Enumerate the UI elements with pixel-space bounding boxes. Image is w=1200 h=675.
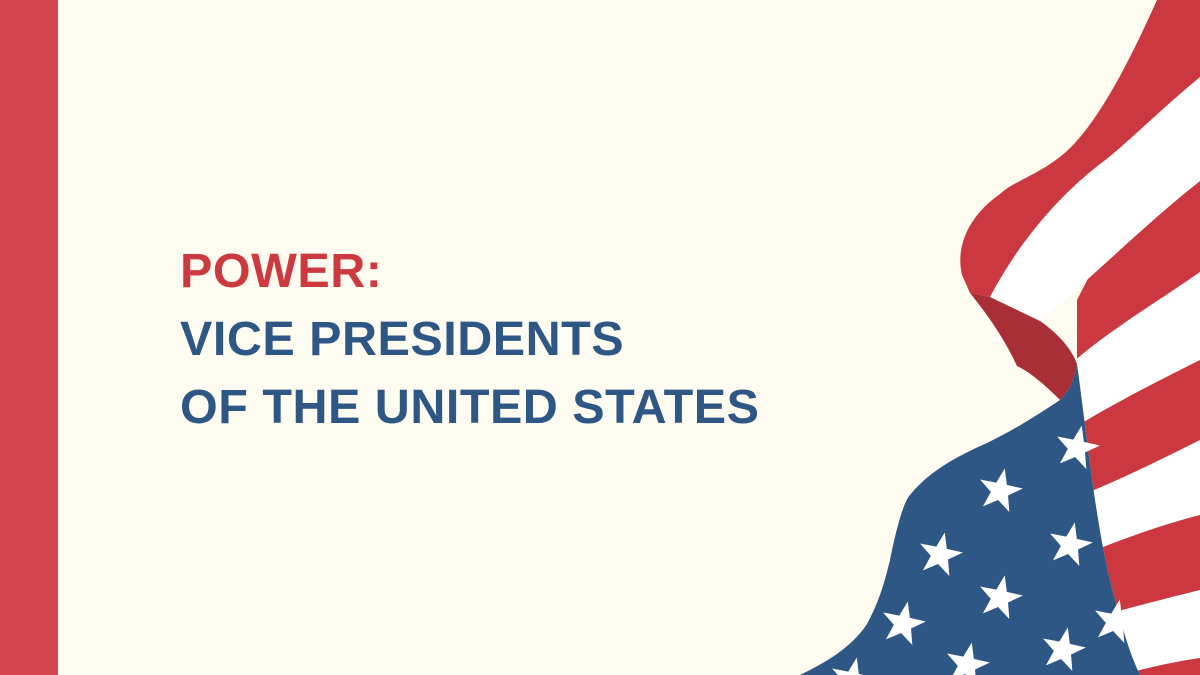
left red bar — [0, 0, 58, 675]
title: OF THE UNITED STATES — [180, 380, 759, 434]
top red stripe — [960, 0, 1200, 297]
title: VICE PRESIDENTS — [180, 312, 624, 366]
flag illustration — [800, 0, 1200, 675]
title — [180, 244, 759, 434]
title: POWER: — [180, 244, 382, 298]
blue canton with stars — [800, 364, 1141, 675]
striped field — [1077, 181, 1200, 675]
fold shadow — [970, 293, 1077, 400]
top white stripe — [990, 77, 1200, 321]
